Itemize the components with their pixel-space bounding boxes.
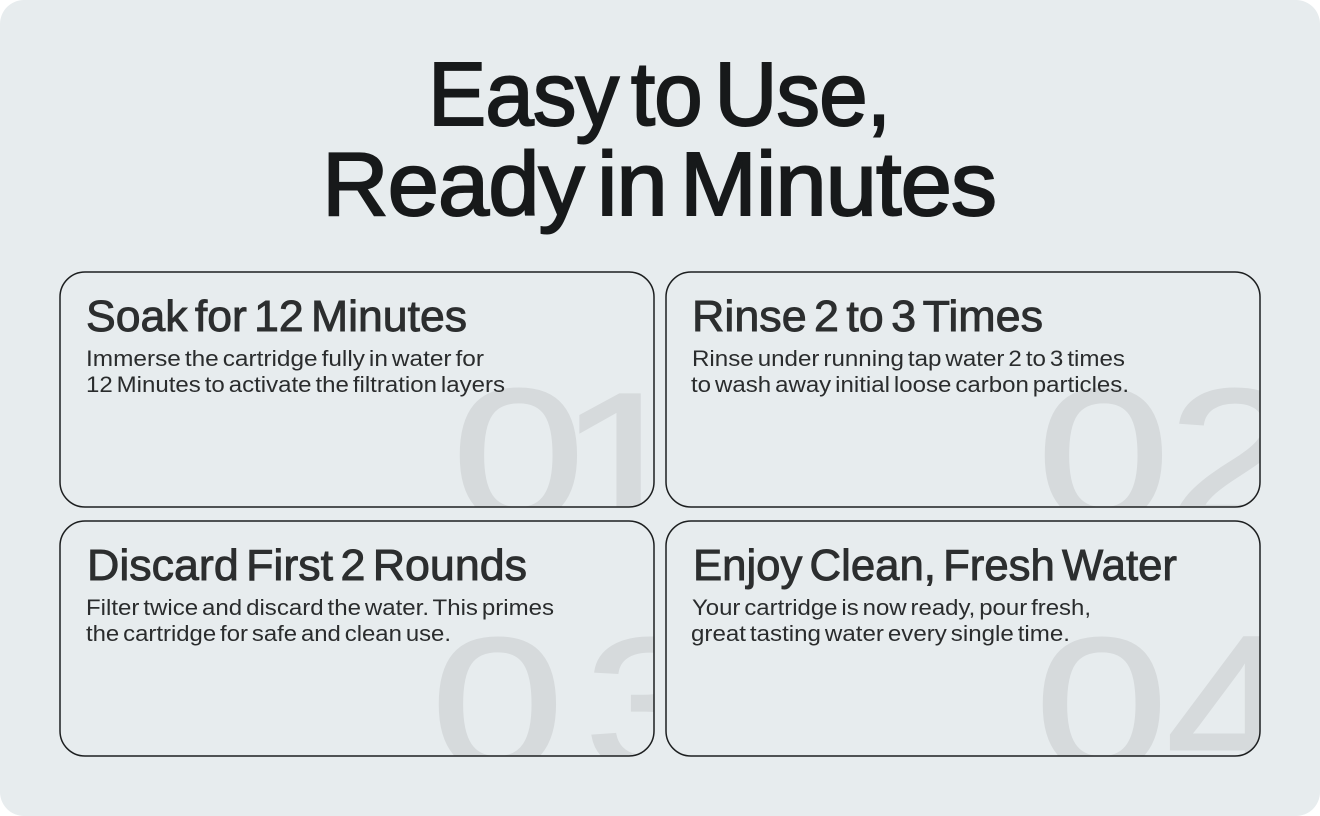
title xyxy=(322,45,996,235)
heading: step 1: Soak for 12 Minutes xyxy=(86,292,467,341)
panel: step 2 xyxy=(665,271,1261,508)
large number 02 xyxy=(1044,388,1260,506)
large number 03: 3 xyxy=(584,598,717,809)
panel: step 3 xyxy=(59,520,655,757)
heading: step 3: Discard First 2 Rounds xyxy=(87,541,527,590)
large number 01: 0 xyxy=(452,349,585,560)
description: step 2: Rinse under running tap water 2 to 3 times xyxy=(692,346,1125,371)
card outline 4 xyxy=(666,521,1260,756)
description: step 2 xyxy=(691,346,1129,397)
description: step 4: Your cartridge is now ready, pour fresh, xyxy=(692,595,1091,620)
description: step 2: to wash away initial loose carbon particles. xyxy=(691,372,1129,397)
description: step 1 xyxy=(86,346,505,397)
panel: step 4 xyxy=(665,520,1261,757)
large number 02: 2 xyxy=(1168,349,1301,560)
large number 04 xyxy=(1042,636,1260,756)
description: step 1: Immerse the cartridge fully in water for xyxy=(86,346,484,371)
description: step 1: 12 Minutes to activate the filtration layers xyxy=(86,372,505,397)
large number 02: 0 xyxy=(1037,349,1170,560)
large number 01 xyxy=(460,388,641,506)
large number 03: 0 xyxy=(431,598,564,809)
description: step 3 xyxy=(86,595,554,646)
card outline 1 xyxy=(60,272,654,507)
heading: step 4: Enjoy Clean, Fresh Water xyxy=(693,541,1177,590)
description: step 3: the cartridge for safe and clean use. xyxy=(86,621,451,646)
panel: step 1 xyxy=(59,271,655,508)
description: step 4 xyxy=(691,595,1091,646)
large number 01: 1 xyxy=(558,353,691,564)
title: Easy to Use, xyxy=(428,45,890,145)
description: step 4: great tasting water every single time. xyxy=(691,621,1070,646)
description: step 3: Filter twice and discard the water. This primes xyxy=(86,595,554,620)
large number 03 xyxy=(438,636,654,756)
title: Ready in Minutes xyxy=(322,135,996,235)
card outline 3 xyxy=(60,521,654,756)
card outline 2 xyxy=(666,272,1260,507)
heading: step 2: Rinse 2 to 3 Times xyxy=(692,292,1043,341)
large number 04: 0 xyxy=(1035,598,1168,809)
